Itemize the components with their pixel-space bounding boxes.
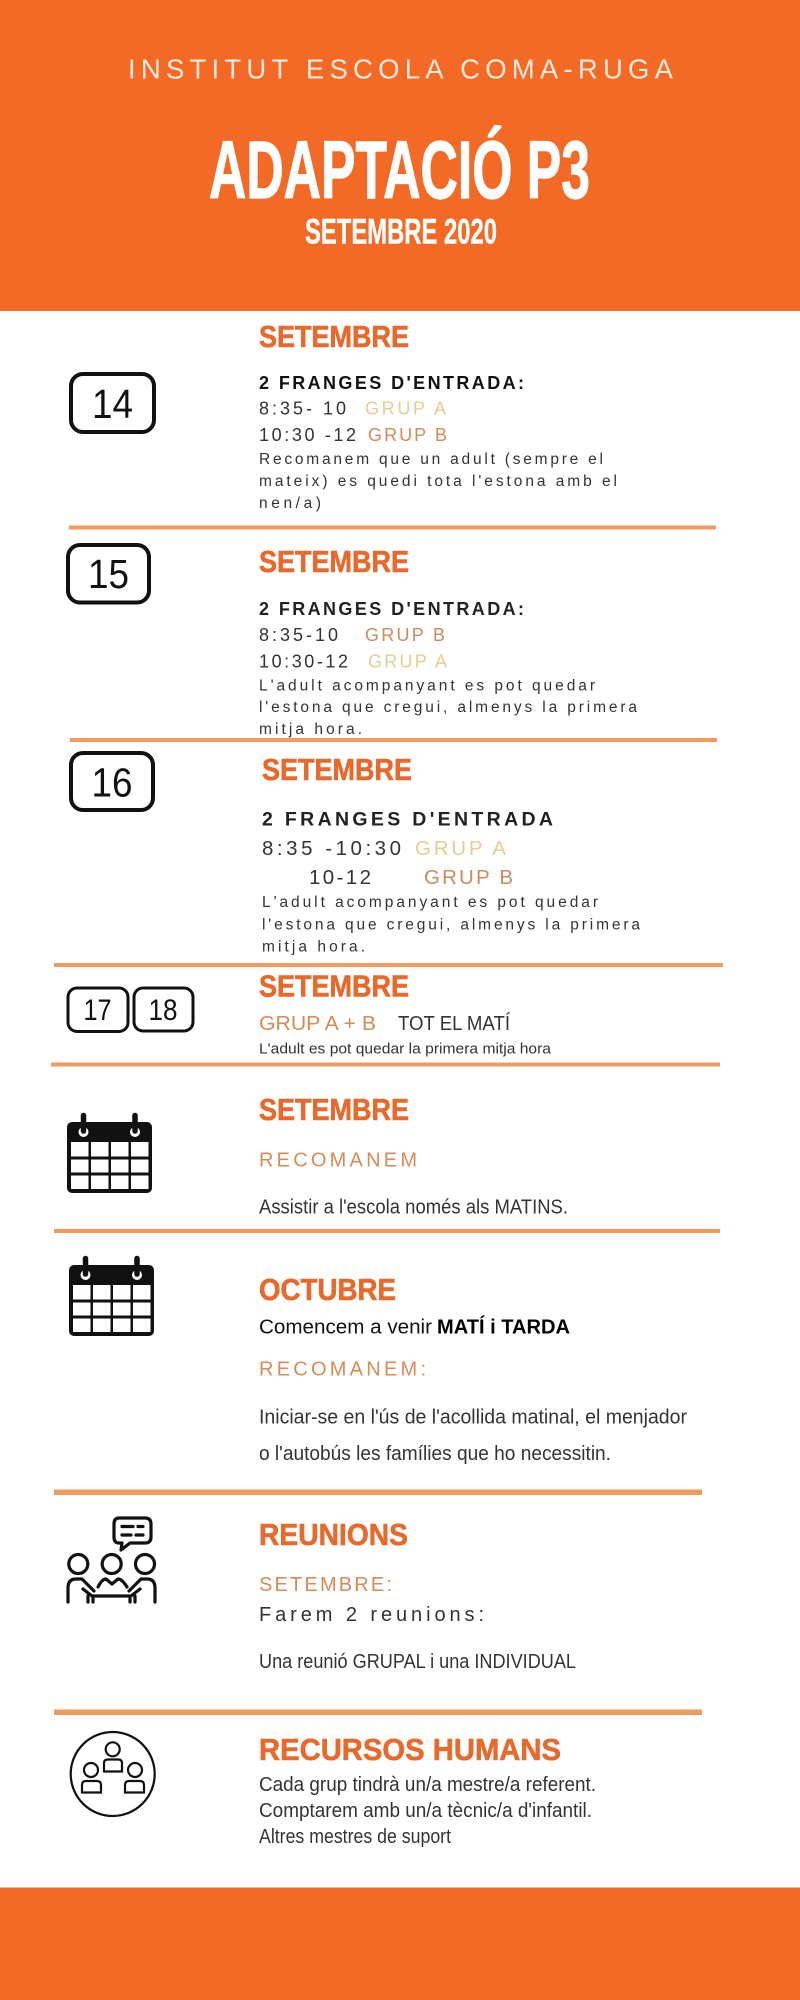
body text: Una reunió GRUPAL i una INDIVIDUAL <box>259 1651 576 1673</box>
icon: meeting <box>68 1518 155 1602</box>
body text: Comencem a venir <box>259 1316 432 1338</box>
heading: SETEMBRE <box>262 753 412 787</box>
body text: Farem 2 reunions: <box>259 1604 484 1626</box>
note text: l'estona que cregui, almenys la primera <box>259 699 637 716</box>
icon: people in circle <box>71 1732 155 1816</box>
panel: 14 setembre <box>71 320 617 512</box>
panel: recursos humans <box>71 1732 596 1848</box>
heading: RECURSOS HUMANS <box>259 1733 561 1767</box>
panel: setembre recommendation <box>67 1093 568 1218</box>
entry slots heading: 2 FRANGES D'ENTRADA <box>262 808 553 830</box>
icon: date 18: 18 <box>148 994 178 1027</box>
entry slots heading: 2 FRANGES D'ENTRADA: <box>259 599 524 619</box>
group label B: GRUP B <box>368 425 447 445</box>
recommendation label: RECOMANEM <box>259 1150 417 1172</box>
recommendation label: RECOMANEM: <box>259 1358 426 1380</box>
group label A: GRUP A <box>365 398 446 418</box>
panel: octubre <box>69 1258 687 1465</box>
panel: reunions <box>68 1518 576 1673</box>
note text: L'adult acompanyant es pot quedar <box>259 678 595 694</box>
icon: date 18 <box>134 988 193 1031</box>
icon: date 16 <box>71 753 153 810</box>
heading: OCTUBRE <box>259 1273 396 1307</box>
note text: l'estona que cregui, almenys la primera <box>262 916 640 934</box>
group label B: GRUP B <box>365 625 445 645</box>
recommendation text: mateix) es quedi tota l'estona amb el <box>259 473 617 490</box>
icon: date 14: 14 <box>92 381 133 427</box>
note text <box>259 678 637 738</box>
note text: L'adult acompanyant es pot quedar <box>262 894 598 911</box>
panel: 17 and 18 setembre <box>68 970 552 1058</box>
icon: date 16: 16 <box>92 760 132 806</box>
time slot: 10:30-12 <box>259 652 348 672</box>
schedule: TOT EL MATÍ <box>398 1012 510 1035</box>
icon: date 14 <box>71 374 154 432</box>
body text: Comptarem amb un/a tècnic/a d'infantil. <box>259 1800 592 1822</box>
body text: Iniciar-se en l'ús de l'acollida matinal, el menjador <box>259 1406 687 1428</box>
emphasised text: MATÍ i TARDA <box>437 1316 570 1338</box>
group label A: GRUP A <box>368 652 447 672</box>
body text <box>259 1774 596 1848</box>
group label B: GRUP B <box>424 866 513 889</box>
note text <box>262 894 640 956</box>
note text: L'adult es pot quedar la primera mitja hora <box>259 1042 552 1058</box>
panel: 16 setembre <box>71 753 640 956</box>
note text: mitja hora. <box>262 938 365 956</box>
entry slots heading: 2 FRANGES D'ENTRADA: <box>259 373 524 393</box>
school name: INSTITUT ESCOLA COMA-RUGA <box>128 54 674 84</box>
body text <box>259 1406 687 1465</box>
icon: calendar <box>67 1116 152 1193</box>
body text: o l'autobús les famílies que ho necessitin. <box>259 1443 611 1465</box>
heading: SETEMBRE <box>259 970 409 1004</box>
heading: SETEMBRE <box>259 320 409 354</box>
heading: SETEMBRE <box>259 545 409 579</box>
footer band <box>0 1888 800 2000</box>
time slot: 8:35- 10 <box>259 398 346 418</box>
icon: date 17: 17 <box>84 994 112 1027</box>
icon: date 15: 15 <box>88 551 129 597</box>
body text: Cada grup tindrà un/a mestre/a referent. <box>259 1774 596 1796</box>
note text: mitja hora. <box>259 721 362 738</box>
body text: Assistir a l'escola només als MATINS. <box>259 1196 568 1218</box>
month label: SETEMBRE: <box>259 1574 392 1596</box>
main title: ADAPTACIÓ P3 <box>209 125 590 216</box>
time slot: 8:35-10 <box>259 625 338 645</box>
group label: GRUP A + B <box>259 1013 376 1035</box>
icon: calendar <box>69 1258 154 1336</box>
body text: Altres mestres de suport <box>259 1826 451 1848</box>
time slot: 8:35 -10:30 <box>262 837 401 860</box>
heading: SETEMBRE <box>259 1093 409 1127</box>
panel: 15 setembre <box>68 545 637 738</box>
recommendation text <box>259 451 617 512</box>
icon: date 15 <box>68 545 149 602</box>
time slot: 10-12 <box>309 866 371 889</box>
recommendation text: Recomanem que un adult (sempre el <box>259 451 603 468</box>
heading: REUNIONS <box>259 1518 408 1552</box>
group label A: GRUP A <box>415 837 506 860</box>
recommendation text: nen/a) <box>259 495 321 512</box>
subtitle: SETEMBRE 2020 <box>305 212 497 252</box>
icon: date 17 <box>68 988 128 1032</box>
header band <box>0 0 800 311</box>
time slot: 10:30 -12 <box>259 425 356 445</box>
